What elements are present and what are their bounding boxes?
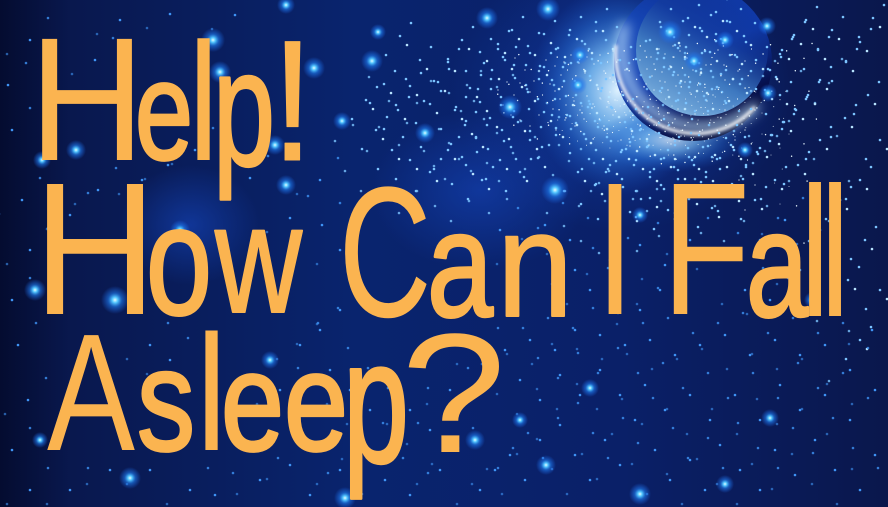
title: s: [137, 319, 195, 481]
title: a: [427, 180, 493, 348]
title: l: [188, 8, 219, 196]
title: C: [339, 150, 431, 356]
title: l: [196, 301, 227, 485]
title: l: [820, 150, 850, 356]
illustration: crescent moon: [530, 0, 772, 195]
title: p: [343, 305, 409, 500]
title: p: [213, 16, 275, 200]
title: n: [497, 180, 573, 348]
title: e: [284, 323, 348, 480]
title: ?: [401, 299, 506, 489]
title: H: [29, 2, 145, 198]
dense sparkle cluster on the moon: [498, 40, 816, 243]
title: F: [662, 144, 750, 355]
title: !: [271, 5, 314, 197]
title: A: [47, 300, 135, 486]
title: a: [746, 180, 808, 348]
title: e: [221, 323, 284, 480]
title: H: [33, 144, 157, 355]
title: e: [135, 32, 193, 189]
title: o: [146, 174, 212, 347]
title: I: [596, 144, 634, 355]
title: l: [800, 150, 830, 356]
title: w: [214, 173, 303, 345]
